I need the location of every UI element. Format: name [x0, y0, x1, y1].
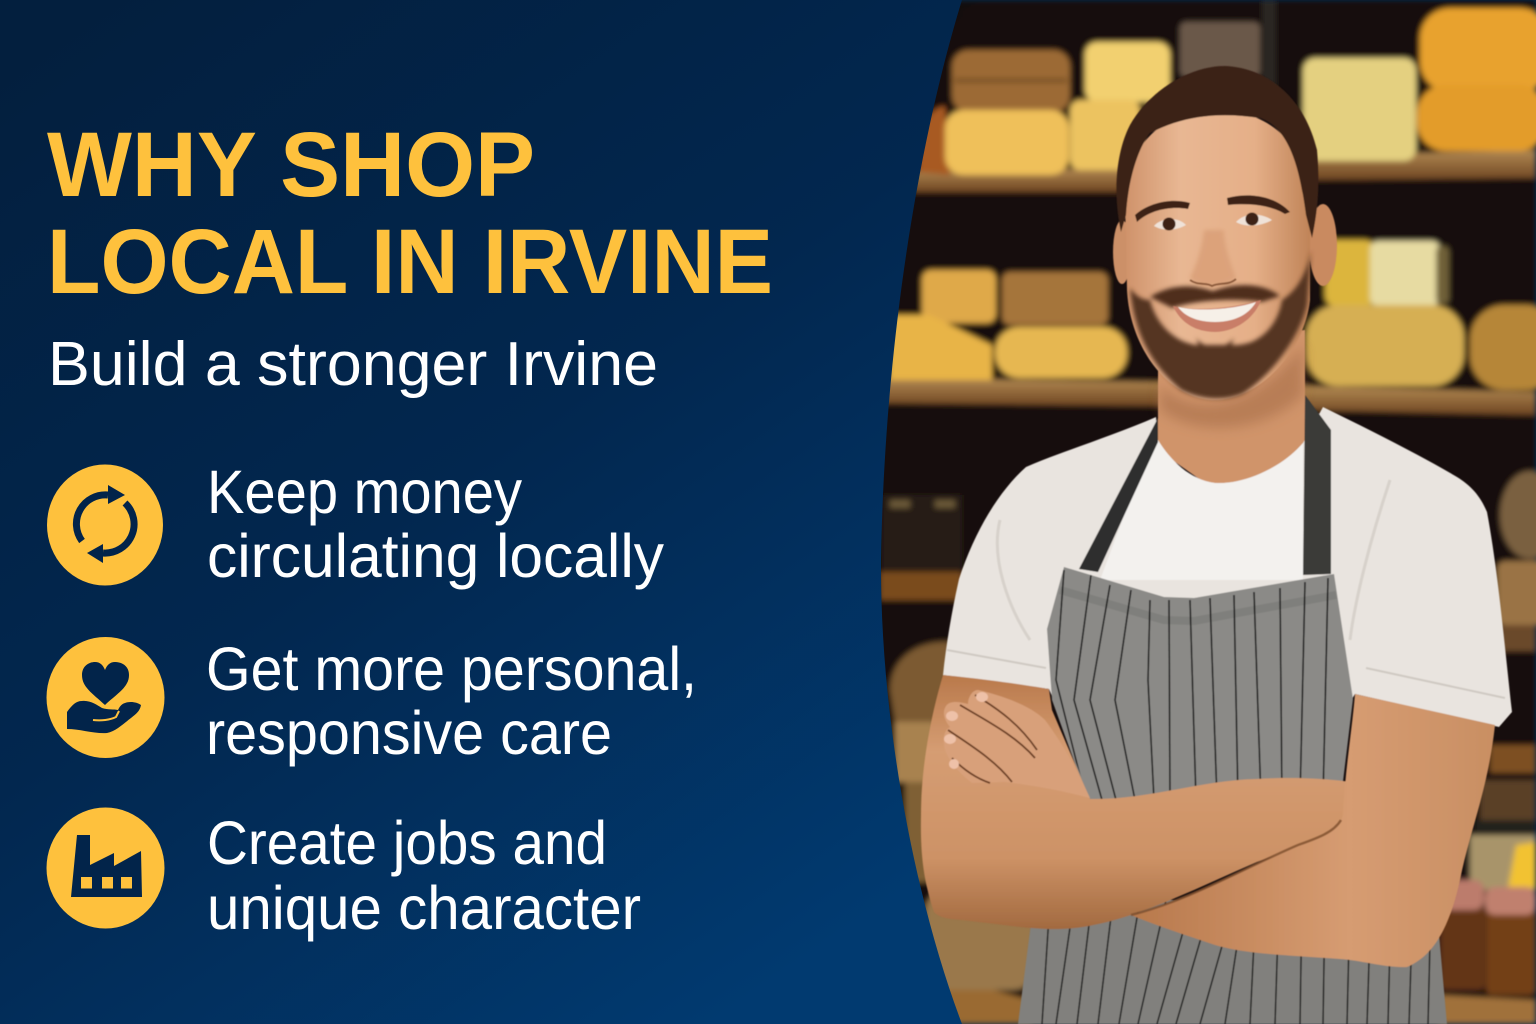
text: keep money: Keep money — [207, 458, 522, 526]
text: personal care: Get more personal, — [206, 635, 697, 703]
text: jobs and character: Create jobs and — [207, 809, 607, 877]
subtitle: Build a stronger Irvine — [48, 330, 658, 399]
eyes — [1135, 195, 1290, 230]
item: keep money circulating — [47, 458, 664, 590]
title: WHY SHOP — [47, 114, 535, 216]
hair — [1116, 66, 1318, 238]
panel: navy curved background — [0, 0, 962, 1024]
lower shelf goods — [882, 471, 1536, 995]
shelves — [880, 150, 1536, 1024]
text: jobs and character — [207, 809, 641, 942]
item: personal care — [46, 635, 697, 767]
icon: factory — [46, 808, 164, 928]
nose — [1190, 230, 1236, 286]
apron bib — [1047, 567, 1353, 805]
cheeses upper shelf — [918, 8, 1536, 175]
cheeses middle shelf — [889, 240, 1536, 390]
t-shirt — [943, 407, 1512, 727]
text: jobs and character: unique character — [207, 874, 641, 942]
title — [47, 114, 773, 313]
photo: shopkeeper — [921, 66, 1512, 1024]
text: personal care: responsive care — [206, 699, 612, 767]
mouth — [1173, 300, 1261, 332]
face — [1125, 110, 1310, 400]
text: keep money: circulating locally — [207, 522, 664, 590]
icon: heart in hand — [46, 637, 164, 758]
neck — [1158, 330, 1305, 490]
apron skirt — [1018, 900, 1447, 1024]
apron straps — [1079, 418, 1158, 572]
icon: circular arrows — [47, 464, 163, 586]
arm over: crossed forearm — [921, 675, 1352, 929]
ears — [1113, 220, 1131, 284]
item: jobs and character — [46, 808, 641, 942]
hand and fingers — [944, 690, 1090, 798]
beard — [1130, 250, 1311, 399]
photo: cheese shop background — [870, 0, 1536, 1024]
text: personal care — [206, 635, 697, 767]
arm under: raised left forearm and upper arm — [1131, 694, 1495, 967]
title: LOCAL IN IRVINE — [47, 211, 773, 313]
text: keep money — [207, 458, 664, 590]
